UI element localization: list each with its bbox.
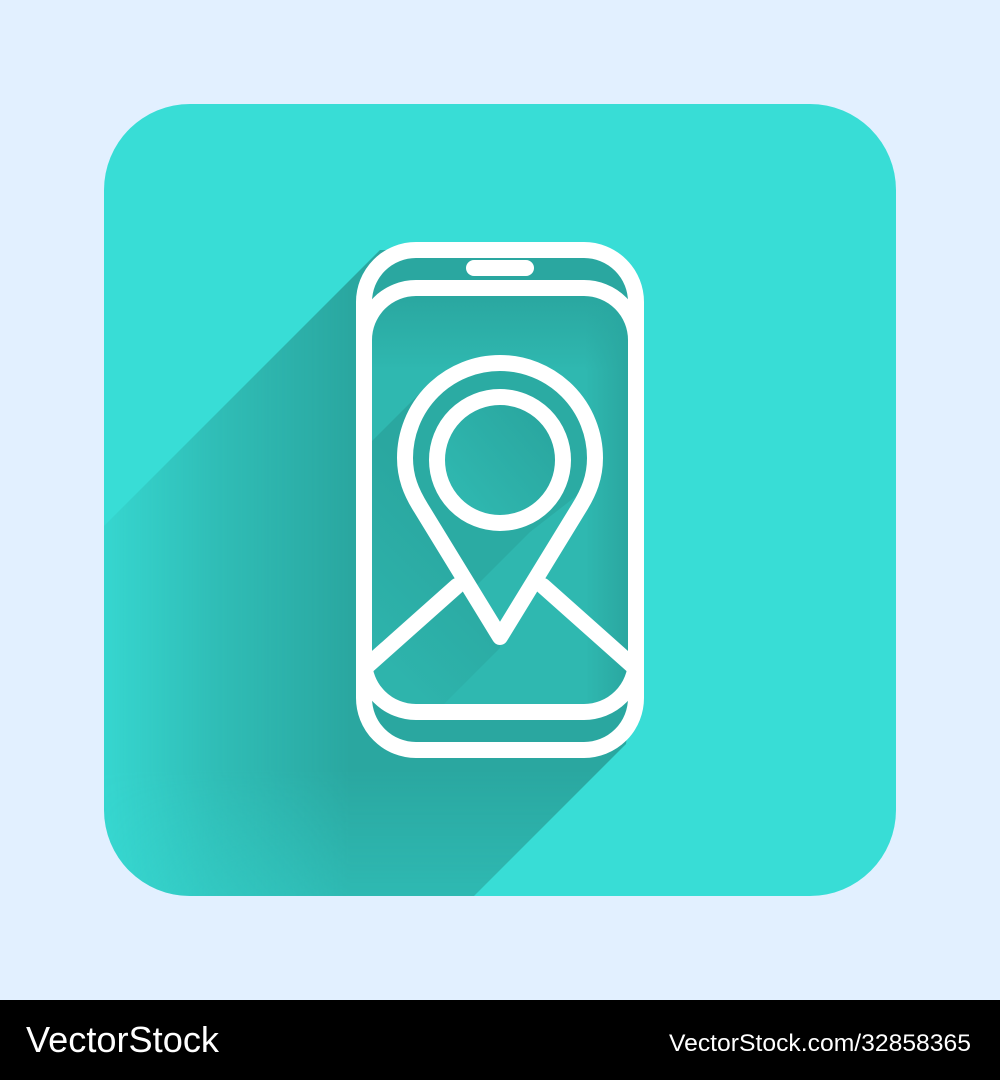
image id url: VectorStock.com/32858365: [669, 1030, 971, 1057]
speaker pill: [466, 260, 534, 276]
map right fold: [543, 586, 634, 667]
brand name: VectorStock: [26, 1019, 220, 1060]
inner circle fill: [445, 439, 512, 515]
location pin outer: [405, 363, 595, 637]
pin interior shading: [441, 371, 587, 562]
long shadow of phone: [104, 250, 632, 896]
phone body: [364, 250, 636, 750]
location pin inner circle: [437, 397, 563, 523]
phone outline: [364, 250, 636, 750]
pin shadow band: [372, 395, 500, 678]
footer bar: [0, 1000, 1000, 1080]
inner screen outline: [364, 288, 636, 712]
pin tip light facet: [478, 496, 576, 621]
map left fold: [366, 586, 457, 667]
phone screen shading: [372, 331, 607, 704]
rounded turquoise square: [104, 104, 896, 896]
